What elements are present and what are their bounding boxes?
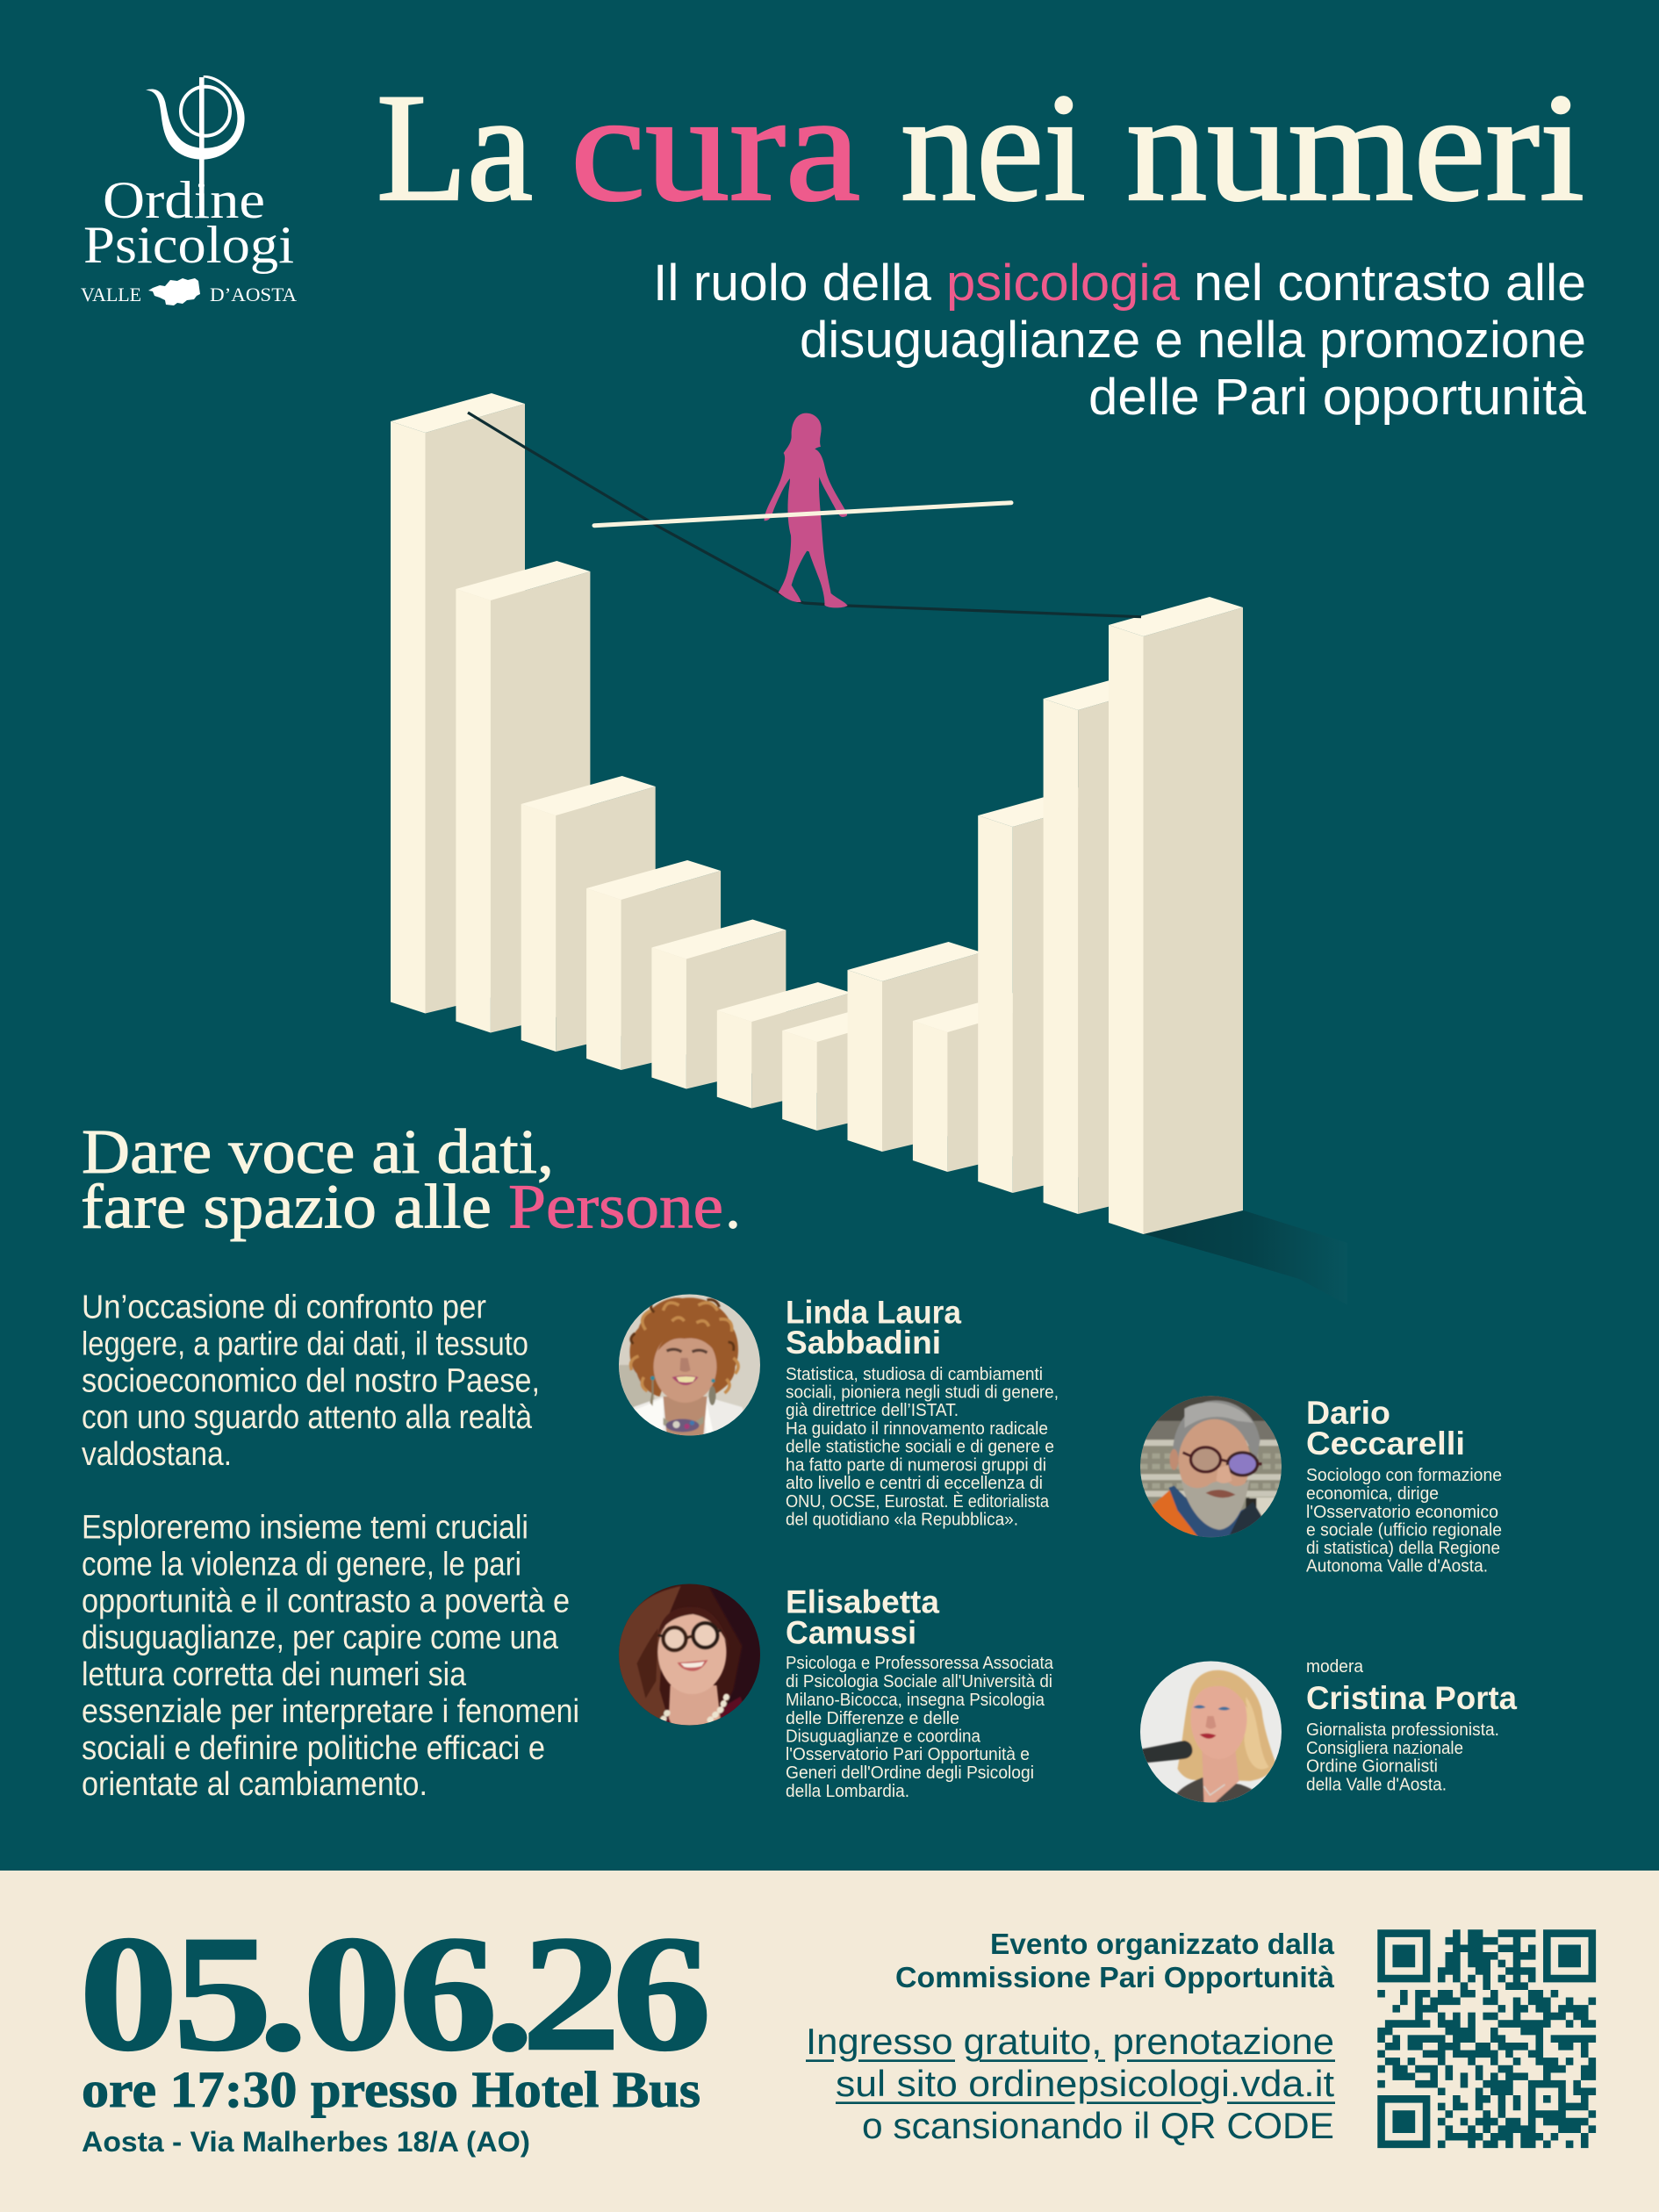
bio: Linda Laura Sabbadini <box>786 1365 1059 1530</box>
subtitle: disuguaglianze e nella promozione <box>800 312 1586 369</box>
logo label: D'Aosta: D’AOSTA <box>210 284 297 305</box>
intro text block <box>82 1289 579 1803</box>
icon: psi symbol <box>146 75 245 218</box>
bio: Elisabetta Camussi: l'Osservatorio Pari Opportunità e <box>786 1745 1030 1764</box>
intro text block: orientate al cambiamento. <box>82 1766 427 1803</box>
name block: Dario Ceccarelli: Ceccarelli <box>1306 1426 1465 1462</box>
bio: Elisabetta Camussi: Milano-Bicocca, insegna Psicologia <box>786 1691 1045 1710</box>
bio: Elisabetta Camussi: di Psicologia Sociale all'Università di <box>786 1672 1052 1691</box>
subtitle <box>653 255 1587 426</box>
bio: Linda Laura Sabbadini: ONU, OCSE, Eurostat. È editorialista <box>786 1491 1050 1512</box>
bio: Dario Ceccarelli: Sociologo con formazione <box>1306 1466 1502 1485</box>
shadow of last bar <box>1144 1210 1347 1305</box>
bio: Cristina Porta: Giornalista professionista. <box>1306 1720 1499 1740</box>
intro text block: come la violenza di genere, le pari <box>82 1547 521 1584</box>
logo wordmark: Ordine: Ordine <box>103 171 265 229</box>
bio: Dario Ceccarelli: e sociale (ufficio regionale <box>1306 1520 1502 1540</box>
name block: Elisabetta Camussi <box>786 1584 939 1650</box>
intro text block: disuguaglianze, per capire come una <box>82 1620 559 1656</box>
bio: Cristina Porta: della Valle d'Aosta. <box>1306 1776 1447 1795</box>
bio: Dario Ceccarelli <box>1306 1466 1502 1576</box>
event date: 05.06.26 <box>79 1902 711 2085</box>
panel: bottom event band <box>0 1871 1659 2212</box>
intro text block: sociali e definire politiche efficaci e <box>82 1730 545 1767</box>
booking information: Ingresso gratuito, prenotazione <box>806 2021 1334 2062</box>
bio: Linda Laura Sabbadini: sociali, pioniera negli studi di genere, <box>786 1383 1059 1403</box>
title: numeri <box>1126 62 1584 233</box>
bio: Elisabetta Camussi: Psicologa e Professoressa Associata <box>786 1654 1054 1673</box>
event address: Aosta - Via Malherbes 18/A (AO) <box>82 2126 530 2158</box>
booking information <box>806 2021 1335 2146</box>
logo: Ordine Psicologi Valle d'Aosta <box>81 75 297 305</box>
title: La <box>377 62 533 233</box>
intro text block: opportunità e il contrasto a povertà e <box>82 1583 570 1620</box>
bio: Linda Laura Sabbadini: ha fatto parte di numerosi gruppi di <box>786 1455 1046 1475</box>
bio: Elisabetta Camussi: della Lombardia. <box>786 1782 909 1801</box>
bio: Dario Ceccarelli: economica, dirige <box>1306 1484 1439 1504</box>
heading: Dare voce ai dati: . <box>725 1172 741 1242</box>
bio: Cristina Porta: Consigliera nazionale <box>1306 1739 1463 1758</box>
name block: Dario Ceccarelli <box>1306 1395 1465 1462</box>
logo wordmark: Psicologi: Psicologi <box>83 216 294 274</box>
bio: Elisabetta Camussi: delle Differenze e delle <box>786 1709 959 1728</box>
heading: Dare voce ai dati: Persone <box>508 1172 723 1242</box>
intro text block: Esploreremo insieme temi cruciali <box>82 1510 528 1547</box>
organiser note: Evento organizzato dalla <box>990 1928 1335 1960</box>
title: nei <box>901 62 1086 233</box>
bio: Dario Ceccarelli: Autonoma Valle d'Aosta. <box>1306 1557 1488 1576</box>
label: modera: modera <box>1306 1657 1364 1677</box>
intro text block: Un’occasione di confronto per <box>82 1289 486 1326</box>
intro text block: lettura corretta dei numeri sia <box>82 1656 467 1693</box>
bio: Linda Laura Sabbadini: del quotidiano «la Repubblica». <box>786 1511 1018 1530</box>
portrait: Dario Ceccarelli <box>1139 1396 1282 1538</box>
intro text block: valdostana. <box>82 1436 232 1473</box>
name block: Elisabetta Camussi: Elisabetta <box>786 1584 939 1620</box>
event time and venue: ore 17:30 presso Hotel Bus <box>82 2061 700 2118</box>
subtitle: delle Pari opportunità <box>1088 369 1587 426</box>
heading: Dare voce ai dati: fare spazio alle <box>81 1172 492 1242</box>
bio: Cristina Porta <box>1306 1720 1499 1795</box>
portrait: Elisabetta Camussi <box>618 1584 760 1726</box>
booking information: o scansionando il QR CODE <box>862 2105 1334 2146</box>
bio: Elisabetta Camussi: Disuguaglianze e coordina <box>786 1727 981 1747</box>
portrait: Cristina Porta <box>1139 1661 1282 1803</box>
logo label: Valle: VALLE <box>81 284 141 305</box>
balance pole <box>594 503 1011 526</box>
bar chart: isometric bars <box>391 393 1243 1234</box>
subtitle: Il ruolo della <box>653 255 932 312</box>
intro text block: con uno sguardo attento alla realtà <box>82 1399 533 1436</box>
subtitle: psicologia <box>946 255 1181 312</box>
name block: Elisabetta Camussi: Camussi <box>786 1614 916 1650</box>
bio: Elisabetta Camussi <box>786 1654 1054 1801</box>
title: cura <box>571 62 860 233</box>
bio: Dario Ceccarelli: l'Osservatorio economico <box>1306 1503 1498 1522</box>
tightrope <box>468 413 1141 617</box>
name block: Linda Laura Sabbadini: Linda Laura <box>786 1294 961 1330</box>
bio: Elisabetta Camussi: Generi dell'Ordine degli Psicologi <box>786 1763 1034 1783</box>
portrait: Linda Laura Sabbadini <box>618 1294 760 1436</box>
subtitle: nel contrasto alle <box>1194 255 1586 312</box>
icon: Aosta valley map <box>148 278 200 305</box>
name block: Linda Laura Sabbadini: Sabbadini <box>786 1325 941 1361</box>
title <box>377 62 1584 233</box>
booking information: sul sito ordinepsicologi.vda.it <box>836 2063 1334 2104</box>
bio: Linda Laura Sabbadini: Ha guidato il rinnovamento radicale <box>786 1419 1048 1439</box>
name block: Dario Ceccarelli: Dario <box>1306 1395 1390 1431</box>
bio: Cristina Porta: Ordine Giornalisti <box>1306 1756 1438 1776</box>
intro text block: essenziale per interpretare i fenomeni <box>82 1693 579 1730</box>
heading: Dare voce ai dati <box>81 1117 741 1242</box>
bio: Linda Laura Sabbadini: delle statistiche sociali e di genere e <box>786 1438 1054 1457</box>
organiser note: Commissione Pari Opportunità <box>895 1961 1335 1993</box>
bio: Linda Laura Sabbadini: alto livello e centri di eccellenza di <box>786 1474 1043 1493</box>
heading: Dare voce ai dati: Dare voce ai dati, <box>82 1117 554 1187</box>
intro text block: socioeconomico del nostro Paese, <box>82 1362 540 1399</box>
intro text block: leggere, a partire dai dati, il tessuto <box>82 1325 528 1362</box>
bio: Linda Laura Sabbadini: Statistica, studiosa di cambiamenti <box>786 1365 1043 1384</box>
name block: Cristina Porta: Cristina Porta <box>1306 1680 1517 1716</box>
name block: Linda Laura Sabbadini <box>786 1294 961 1361</box>
bio: Dario Ceccarelli: di statistica) della Regione <box>1306 1539 1500 1558</box>
organiser note <box>895 1928 1335 1993</box>
QR code <box>1377 1929 1596 2148</box>
bio: Linda Laura Sabbadini: già direttrice dell’ISTAT. <box>786 1401 959 1420</box>
figure: woman walking on rope <box>765 413 848 607</box>
